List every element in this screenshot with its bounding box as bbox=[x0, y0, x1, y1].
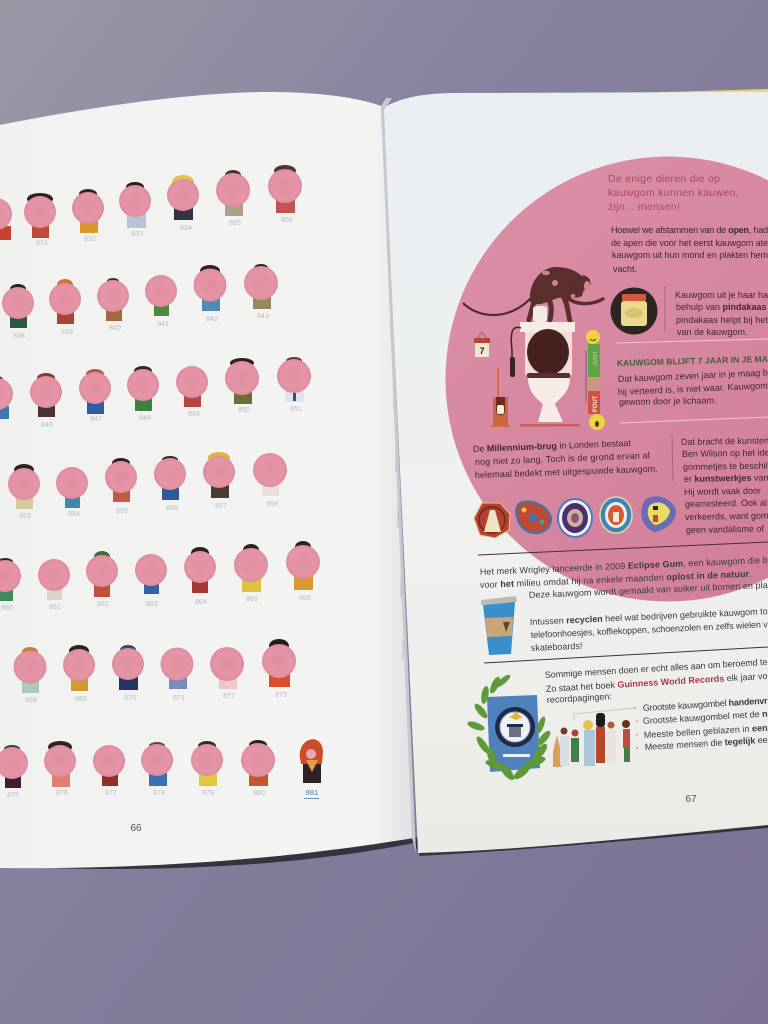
text: Ben Wilson: gearresteerd. Ook al bbox=[685, 498, 767, 509]
illustration: group of record holders bbox=[553, 713, 630, 767]
text: Ben Wilson bbox=[681, 435, 768, 535]
row of figures 860-866: 865 bbox=[246, 596, 258, 603]
divider bbox=[478, 542, 768, 555]
text: Guinness intro: Zo staat het boek Guinness World Records elk jaar vo bbox=[546, 671, 768, 694]
row of figures 868-873: 873 bbox=[275, 692, 287, 699]
text: apes: kauwgom uit hun mond en plakten hem bbox=[612, 250, 768, 260]
text: 7 years bbox=[618, 367, 768, 407]
icon: calendar: 7 bbox=[479, 346, 485, 356]
scale: true or false: JUIST bbox=[593, 350, 599, 366]
row of figures 868-873: 869 bbox=[75, 696, 87, 703]
text: apes: de apen die voor het eerst kauwgom ate bbox=[611, 238, 768, 248]
divider bbox=[484, 647, 768, 663]
list of record pages: Grootste kauwgombel handenvr bbox=[643, 696, 768, 713]
text: recycling bbox=[530, 606, 768, 653]
divider bbox=[664, 286, 666, 332]
circle heading bbox=[608, 173, 739, 213]
text: Eclipse Gum: Deze kauwgom wordt gemaakt van suiker uit bomen en pla bbox=[529, 580, 768, 600]
row of figures 853-858: 856 bbox=[166, 505, 178, 512]
row of figures 853-858: 855 bbox=[116, 508, 128, 515]
row of figures 831-836: 855 bbox=[229, 220, 241, 227]
text: peanut butter tip bbox=[675, 290, 768, 337]
row of figures 831-836: 831 bbox=[36, 240, 48, 247]
row of figures 875-881: 879 bbox=[202, 790, 214, 797]
row of figures 838-843: 842 bbox=[206, 316, 218, 323]
list of record pages: Meeste bellen geblazen in een bbox=[644, 723, 768, 740]
text: Eclipse Gum: Het merk Wrigley lanceerde in 2009 Eclipse Gum, een kauwgom die b bbox=[480, 555, 768, 577]
text: apes: Hoewel we afstammen van de open, had bbox=[611, 225, 768, 235]
text: peanut butter tip: pindakaas helpt bij het bbox=[676, 315, 768, 325]
figure 881: girl with red hair: 881 bbox=[306, 788, 318, 797]
row of figures 868-873: 872 bbox=[223, 693, 235, 700]
row of figures 838-843: 841 bbox=[157, 321, 169, 328]
row of figures 846-851: 847 bbox=[90, 416, 102, 423]
row of figures 853-858: 853 bbox=[19, 513, 31, 520]
row of figures 846-851: 851 bbox=[290, 406, 302, 413]
illustration: monkey bbox=[463, 267, 603, 321]
divider bbox=[616, 339, 768, 343]
divider bbox=[620, 417, 768, 423]
list of record pages: Meeste mensen die tegelijk ee bbox=[645, 735, 768, 752]
page number 67: 67 bbox=[685, 794, 697, 805]
heading: 7 years: KAUWGOM BLIJFT 7 JAAR IN JE MA bbox=[617, 354, 768, 368]
row of figures 860-866: 860 bbox=[1, 605, 13, 612]
text: 7 years: Dat kauwgom zeven jaar in je maag b bbox=[618, 367, 768, 384]
text: Ben Wilson: er kunstwerkjes van bbox=[684, 473, 768, 484]
text: recycling: telefoonhoesjes, koffiekoppen, schoenzolen en zelfs wielen v bbox=[531, 619, 768, 640]
row of figures 831-836: 832 bbox=[84, 236, 96, 243]
scale: true or false bbox=[586, 330, 605, 430]
row of figures 838-843: 839 bbox=[61, 329, 73, 336]
text: Eclipse Gum: voor het milieu omdat hij na enkele maanden oplost in de natuur. bbox=[480, 569, 752, 590]
circle heading: zijn... mensen! bbox=[608, 201, 680, 213]
row of figures 831-836 bbox=[0, 165, 302, 247]
row of figures 838-843: 838 bbox=[13, 333, 25, 340]
icon: toilet brush bbox=[491, 368, 510, 427]
row of figures 853-858: 857 bbox=[215, 503, 227, 510]
text: millennium bridge: nog niet zo lang. Toch is de grond ervan al bbox=[475, 450, 650, 467]
row of figures 846-851 bbox=[0, 357, 311, 429]
text: recycling: skateboards! bbox=[531, 641, 583, 653]
page number 66: 66 bbox=[130, 823, 142, 834]
row of figures 860-866: 866 bbox=[299, 595, 311, 602]
row of figures 860-866 bbox=[0, 541, 320, 612]
row of figures 868-873 bbox=[14, 639, 296, 704]
text: Guinness intro: recordpagingen: bbox=[547, 691, 612, 705]
row of figures 853-858: 854 bbox=[68, 511, 80, 518]
row of figures 853-858 bbox=[8, 452, 287, 520]
text: Eclipse Gum bbox=[480, 555, 768, 600]
row of figures 831-836: 856 bbox=[281, 217, 293, 224]
text: Guinness intro bbox=[545, 657, 768, 705]
text: Ben Wilson: geen vandalisme of bbox=[686, 524, 765, 535]
figure 881: girl with red hair bbox=[300, 739, 323, 799]
gum artworks bbox=[474, 496, 676, 538]
circle heading: kauwgom kunnen kauwen, bbox=[608, 187, 739, 199]
list of record pages bbox=[643, 696, 768, 752]
text: millennium bridge bbox=[473, 438, 658, 480]
row of figures 875-881: 877 bbox=[105, 790, 117, 797]
panel: left page bubble figures bbox=[0, 165, 323, 799]
scale: true or false: FOUT bbox=[593, 395, 599, 412]
text: peanut butter tip: Kauwgom uit je haar ha bbox=[675, 290, 768, 300]
row of figures 860-866: 862 bbox=[97, 601, 109, 608]
book shadow and edge bbox=[0, 820, 768, 869]
text: apes bbox=[611, 225, 768, 274]
row of figures 853-858: 858 bbox=[266, 501, 278, 508]
row of figures 838-843 bbox=[2, 264, 278, 340]
text: Ben Wilson: Hij wordt vaak door bbox=[684, 486, 761, 497]
gutter binding bbox=[381, 98, 416, 852]
row of figures 875-881: 880 bbox=[253, 790, 265, 797]
row of figures 831-836: 833 bbox=[131, 231, 143, 238]
text: Ben Wilson: verkeerds, want gom bbox=[685, 511, 768, 522]
icon: chain bbox=[510, 327, 521, 377]
illustration: toilet bbox=[520, 306, 580, 426]
row of figures 846-851: 850 bbox=[238, 407, 250, 414]
illustration: Guinness book with laurel bbox=[466, 673, 552, 782]
text: Guinness intro: Sommige mensen doen er echt alles aan om beroemd te bbox=[545, 657, 768, 680]
row of figures 838-843: 840 bbox=[109, 325, 121, 332]
icon: coffee cup bbox=[481, 596, 517, 655]
row of figures 860-866: 861 bbox=[49, 604, 61, 611]
left page bbox=[0, 92, 414, 868]
row of figures 860-866: 864 bbox=[195, 599, 207, 606]
text: apes: vacht. bbox=[613, 264, 637, 274]
right page bbox=[383, 92, 768, 853]
row of figures 846-851: 848 bbox=[139, 415, 151, 422]
divider bbox=[672, 435, 673, 481]
panel: pink circle bbox=[446, 156, 768, 602]
row of figures 875-881 bbox=[0, 739, 323, 799]
row of figures 846-851: 849 bbox=[188, 411, 200, 418]
text: 7 years: gewoon door je lichaam. bbox=[619, 395, 717, 407]
row of figures 860-866: 863 bbox=[146, 601, 158, 608]
row of figures 875-881: 875 bbox=[7, 792, 19, 799]
icon: calendar bbox=[474, 332, 490, 357]
text: recycling: Intussen recyclen heel wat bedrijven gebruikte kauwgom to bbox=[530, 606, 768, 627]
text: millennium bridge: helemaal bedekt met uitgespuwde kauwgom. bbox=[475, 464, 658, 480]
row of figures 846-851: 846 bbox=[41, 422, 53, 429]
row of figures 838-843: 843 bbox=[257, 313, 269, 320]
text: millennium bridge: De Millennium-brug in Londen bestaat bbox=[473, 438, 632, 454]
circle heading: De enige dieren die op bbox=[608, 173, 720, 185]
icon: peanut butter jar bbox=[610, 288, 658, 334]
row of figures 868-873: 871 bbox=[173, 695, 185, 702]
connector lines bbox=[574, 707, 638, 749]
row of figures 868-873: 868 bbox=[25, 697, 37, 704]
list of record pages: Grootste kauwgombel met de n bbox=[643, 709, 768, 726]
row of figures 875-881: 878 bbox=[153, 790, 165, 797]
text: 7 years: hij verteerd is, is niet waar. Kauwgom bbox=[618, 380, 768, 397]
row of figures 868-873: 870 bbox=[124, 695, 136, 702]
row of figures 831-836: 834 bbox=[180, 225, 192, 232]
yellow cover edge bbox=[635, 89, 768, 96]
text: peanut butter tip: van de kauwgom. bbox=[677, 327, 748, 337]
row of figures 875-881: 876 bbox=[56, 790, 68, 797]
